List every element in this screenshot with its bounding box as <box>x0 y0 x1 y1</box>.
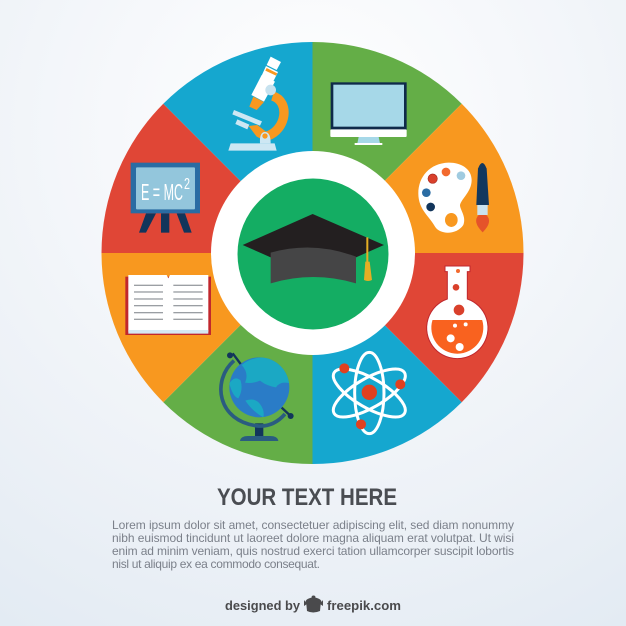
icon: graduation cap <box>243 214 384 283</box>
heading: YOUR TEXT HERE <box>217 484 397 511</box>
icon: blackboard with formula <box>131 163 200 233</box>
green centre disc <box>238 178 388 330</box>
body text block: enim ad minim veniam, quis nostrud exerci tation ullamcorper suscipit lobortis <box>112 544 514 558</box>
icon: globe <box>221 352 294 441</box>
icon: blackboard with formula: E = MC <box>141 179 183 205</box>
footer credit: freepik.com <box>327 598 401 613</box>
icon: freepik logo <box>304 596 323 612</box>
body text block <box>112 518 514 571</box>
icon: paint palette and brush <box>418 163 489 233</box>
body text block: nibh euismod tincidunt ut laoreet dolore magna aliquam erat volutpat. Ut wisi <box>112 531 514 545</box>
icon: flask <box>427 266 488 359</box>
icon: blackboard with formula: 2 <box>184 176 190 193</box>
icon: computer monitor <box>330 82 407 145</box>
panel: segmented wheel <box>102 42 524 464</box>
footer credit <box>225 596 401 613</box>
body text block: Lorem ipsum dolor sit amet, consectetuer adipiscing elit, sed diam nonummy <box>112 518 514 532</box>
white centre ring <box>211 151 415 355</box>
body text block: nisl ut aliquip ex ea commodo consequat. <box>112 557 320 571</box>
icon: atom <box>327 352 412 434</box>
icon: open book <box>125 275 211 335</box>
footer credit: designed by <box>225 598 301 613</box>
icon: microscope <box>228 57 284 151</box>
